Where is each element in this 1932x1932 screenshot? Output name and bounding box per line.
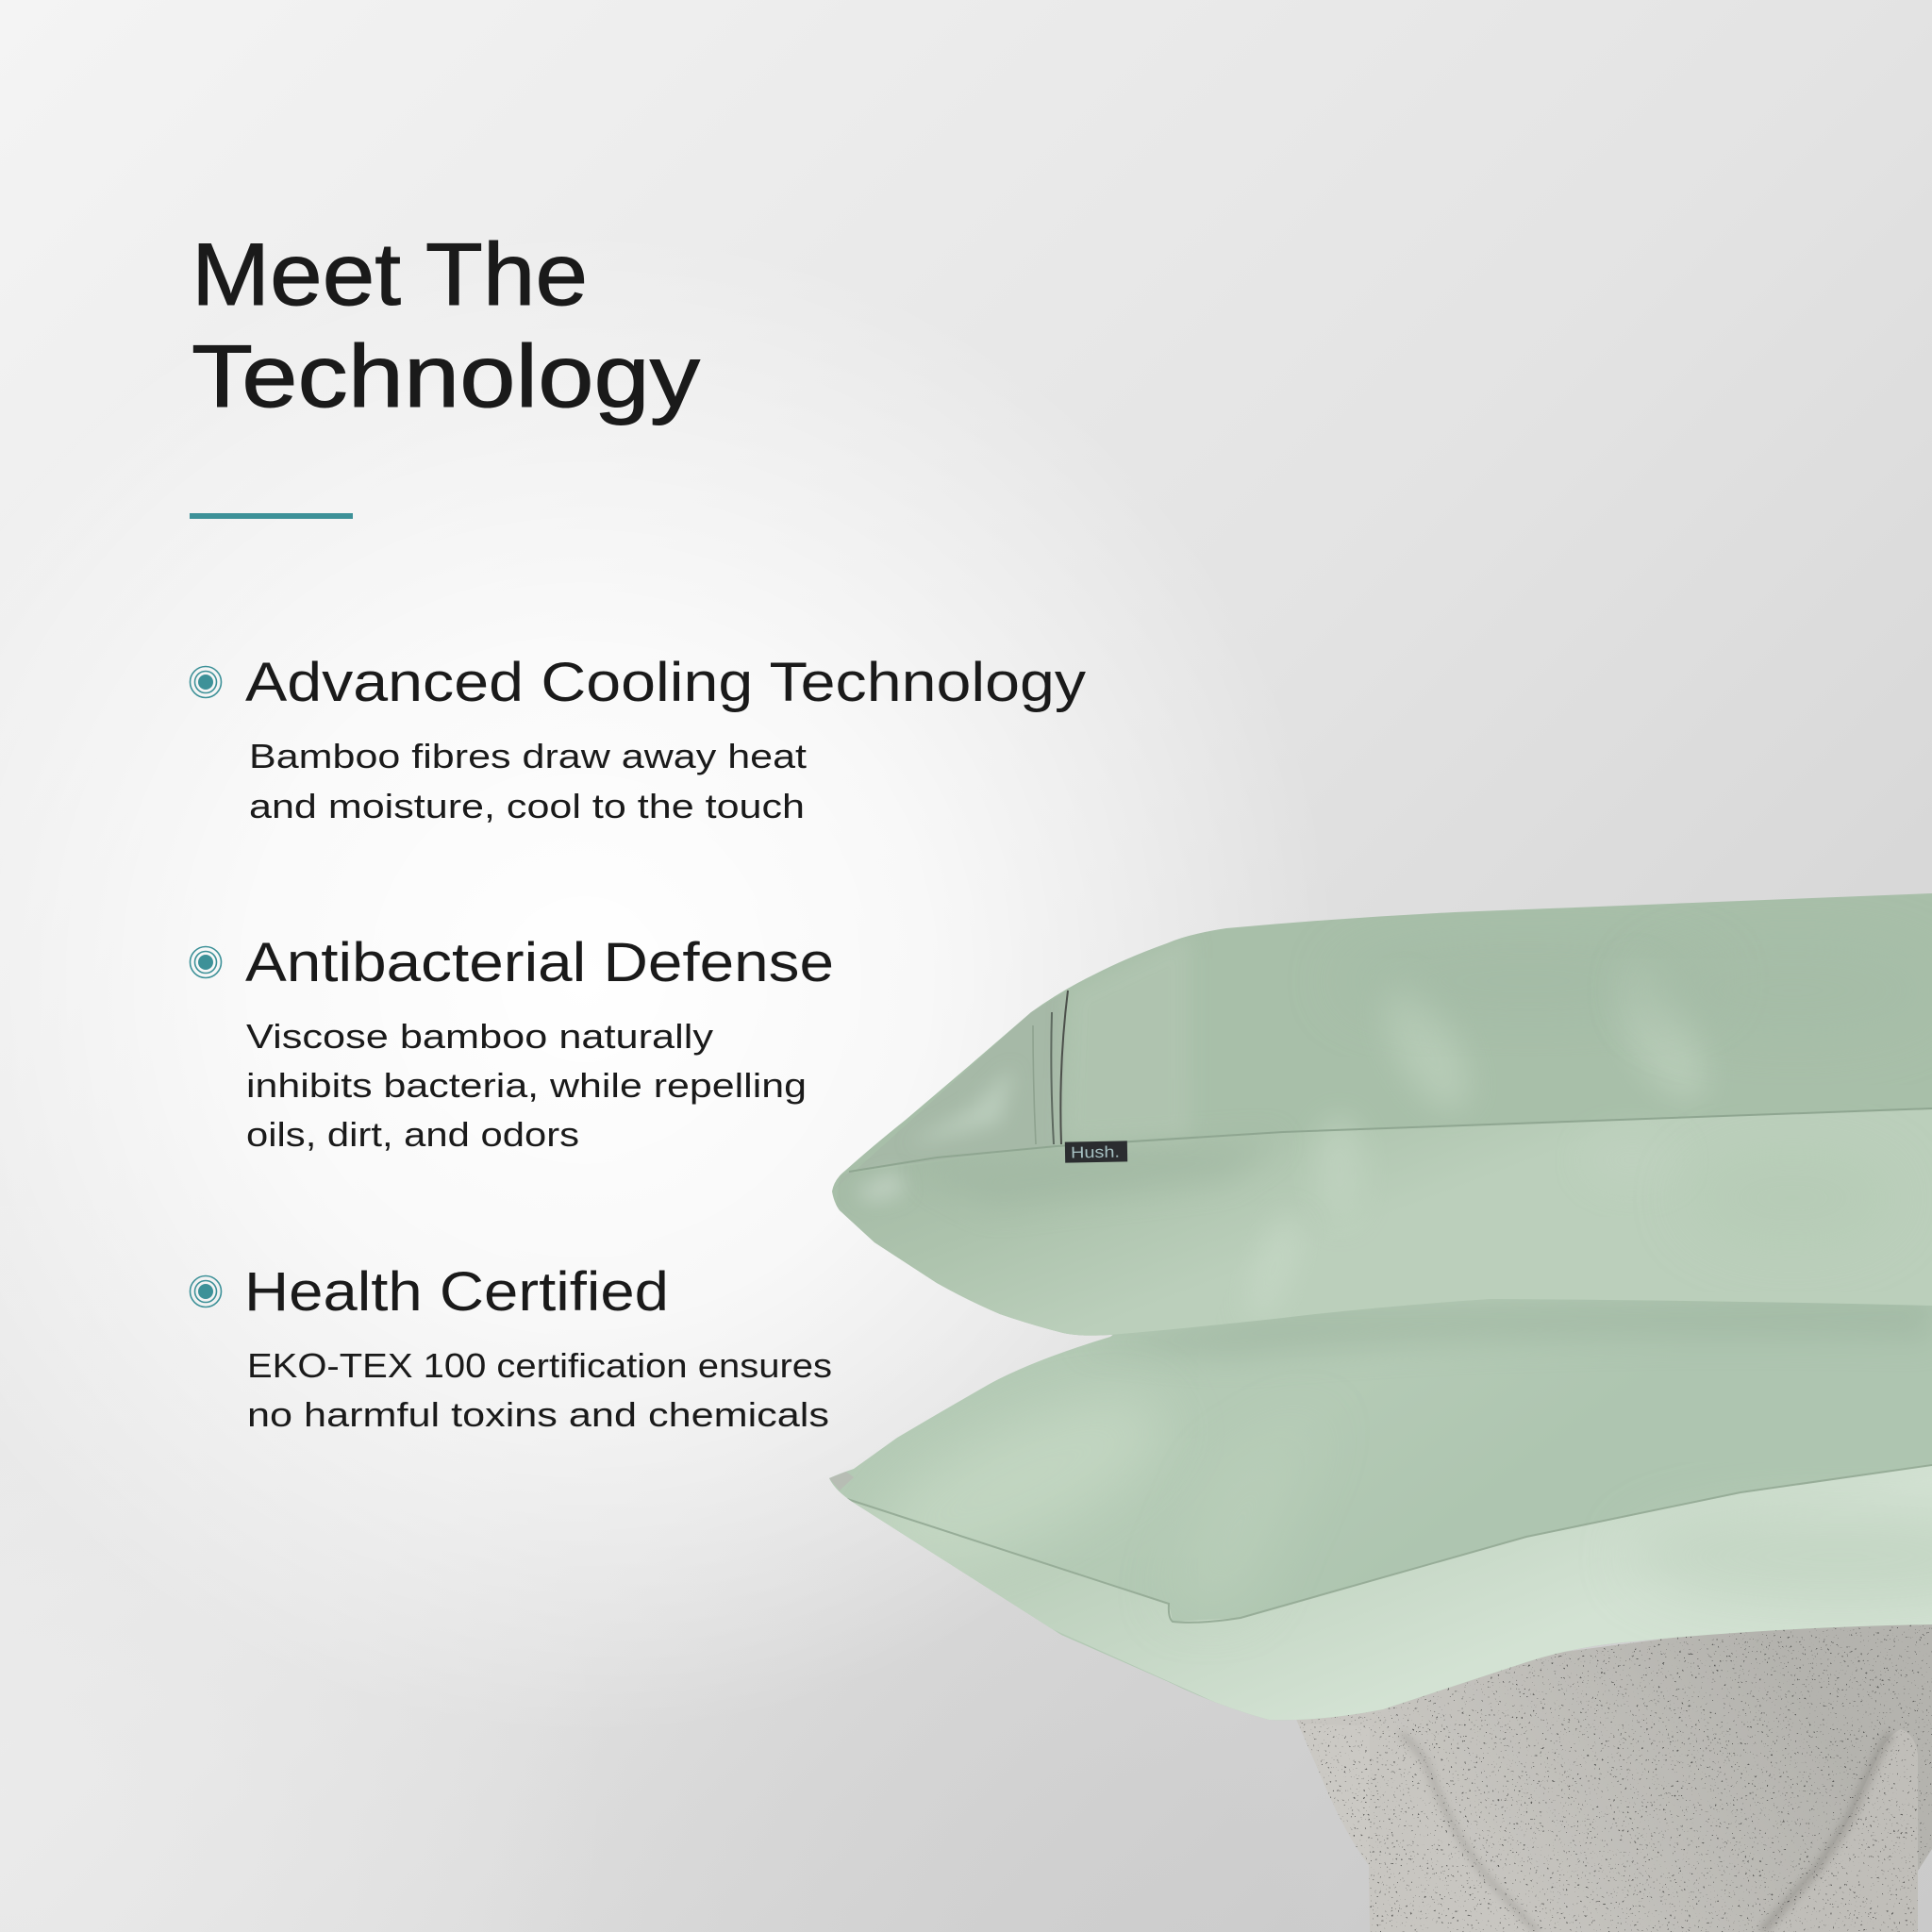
feature description	[247, 1346, 832, 1434]
feature: health certified	[191, 1261, 832, 1434]
feature heading: Advanced Cooling Technology	[245, 652, 1086, 713]
brand tag: Hush.	[1071, 1143, 1120, 1161]
shadow from top pillow	[1158, 1306, 1917, 1353]
feature description: no harmful toxins and chemicals	[247, 1395, 829, 1434]
feature description: inhibits bacteria, while repelling	[246, 1066, 807, 1105]
icon: bullet target	[191, 666, 221, 698]
feature heading: Antibacterial Defense	[245, 932, 834, 993]
title: Meet The	[192, 225, 588, 324]
lower pillow corner	[829, 1472, 854, 1491]
lighter band right of stitching	[1078, 962, 1175, 1126]
icon: bullet target	[191, 947, 221, 977]
title	[192, 225, 700, 425]
feature: advanced cooling	[191, 652, 1086, 825]
feature description	[249, 737, 807, 825]
upper pillow	[821, 893, 1932, 1340]
lower pillow	[829, 1283, 1932, 1726]
upper pillow flap	[1030, 1012, 1031, 1013]
stand shoulder light	[1298, 1724, 1370, 1868]
feature: antibacterial defense	[191, 932, 834, 1154]
lower pillow sheen	[898, 1407, 1144, 1545]
stand right leg	[1827, 1729, 1918, 1932]
lower pillow body	[829, 1283, 1932, 1720]
concrete stand	[1296, 1624, 1932, 1932]
upper pillow lower panel	[821, 1108, 1932, 1340]
panel shadow under seam	[920, 1140, 1283, 1208]
heading accent rule	[190, 513, 353, 519]
lower flap	[847, 1465, 1932, 1726]
leg edge shadows	[1401, 1734, 1537, 1932]
fabric highlights	[1392, 1007, 1464, 1102]
feature description: oils, dirt, and odors	[246, 1115, 579, 1154]
brand tag	[1065, 1141, 1127, 1163]
title: Technology	[192, 326, 700, 425]
lower seam	[847, 1465, 1932, 1623]
flap right shade	[1666, 1512, 1932, 1602]
feature heading: Health Certified	[244, 1261, 669, 1323]
upper pillow body	[832, 893, 1932, 1336]
upper seam	[849, 1108, 1932, 1172]
icon: bullet target	[191, 1275, 221, 1307]
stand body	[1283, 1604, 1932, 1932]
feature description: Viscose bamboo naturally	[246, 1017, 713, 1056]
stitching lines	[1033, 991, 1068, 1144]
stand left leg	[1370, 1731, 1537, 1932]
feature description: EKO-TEX 100 certification ensures	[247, 1346, 832, 1385]
feature description: Bamboo fibres draw away heat	[249, 737, 807, 775]
feature description: and moisture, cool to the touch	[249, 787, 805, 825]
feature description	[246, 1017, 807, 1154]
concrete pits	[1300, 1624, 1932, 1932]
